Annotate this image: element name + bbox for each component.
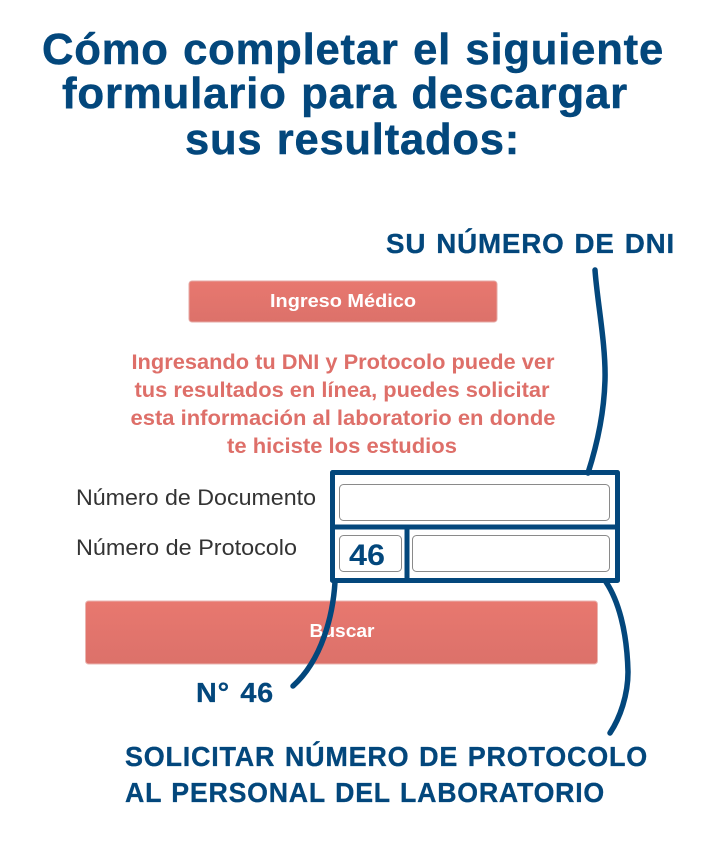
instructions text: Ingresando tu DNI y Protocolo puede ver [132, 350, 555, 374]
instructions text: te hiciste los estudios [227, 434, 457, 458]
button: ingreso médico [189, 281, 497, 322]
label: su número de DNI: SU NÚMERO DE DNI [386, 228, 675, 259]
field label: número de documento: Número de Documento [76, 485, 316, 510]
highlight frame over inputs [332, 472, 618, 580]
button: buscar [86, 601, 598, 664]
title: formulario para descargar [62, 69, 628, 118]
button: buscar: Buscar [310, 621, 374, 641]
title: Cómo completar el siguiente [42, 25, 664, 74]
label: solicitar número de protocolo [125, 741, 648, 808]
label: solicitar número de protocolo: SOLICITAR NÚMERO DE PROTOCOLO [125, 741, 648, 772]
title [42, 25, 664, 164]
input: documento [340, 484, 610, 520]
label: N° 46: N° 46 [196, 677, 274, 708]
title: sus resultados: [185, 115, 520, 164]
field label: número de protocolo: Número de Protocolo [76, 535, 297, 560]
instructions text [130, 350, 556, 458]
button: ingreso médico: Ingreso Médico [270, 291, 416, 311]
input: protocolo number [412, 536, 610, 572]
arrow: DNI line [588, 270, 605, 473]
arrow: N° 46 line [293, 582, 335, 686]
instructions text: tus resultados en línea, puedes solicitar [134, 378, 550, 402]
label: solicitar número de protocolo: AL PERSONAL DEL LABORATORIO [125, 777, 605, 808]
arrow: protocol line [606, 582, 628, 733]
input: protocolo prefix [340, 536, 402, 572]
instructions text: esta información al laboratorio en donde [130, 406, 556, 430]
input: protocolo prefix: 46 [349, 539, 385, 572]
